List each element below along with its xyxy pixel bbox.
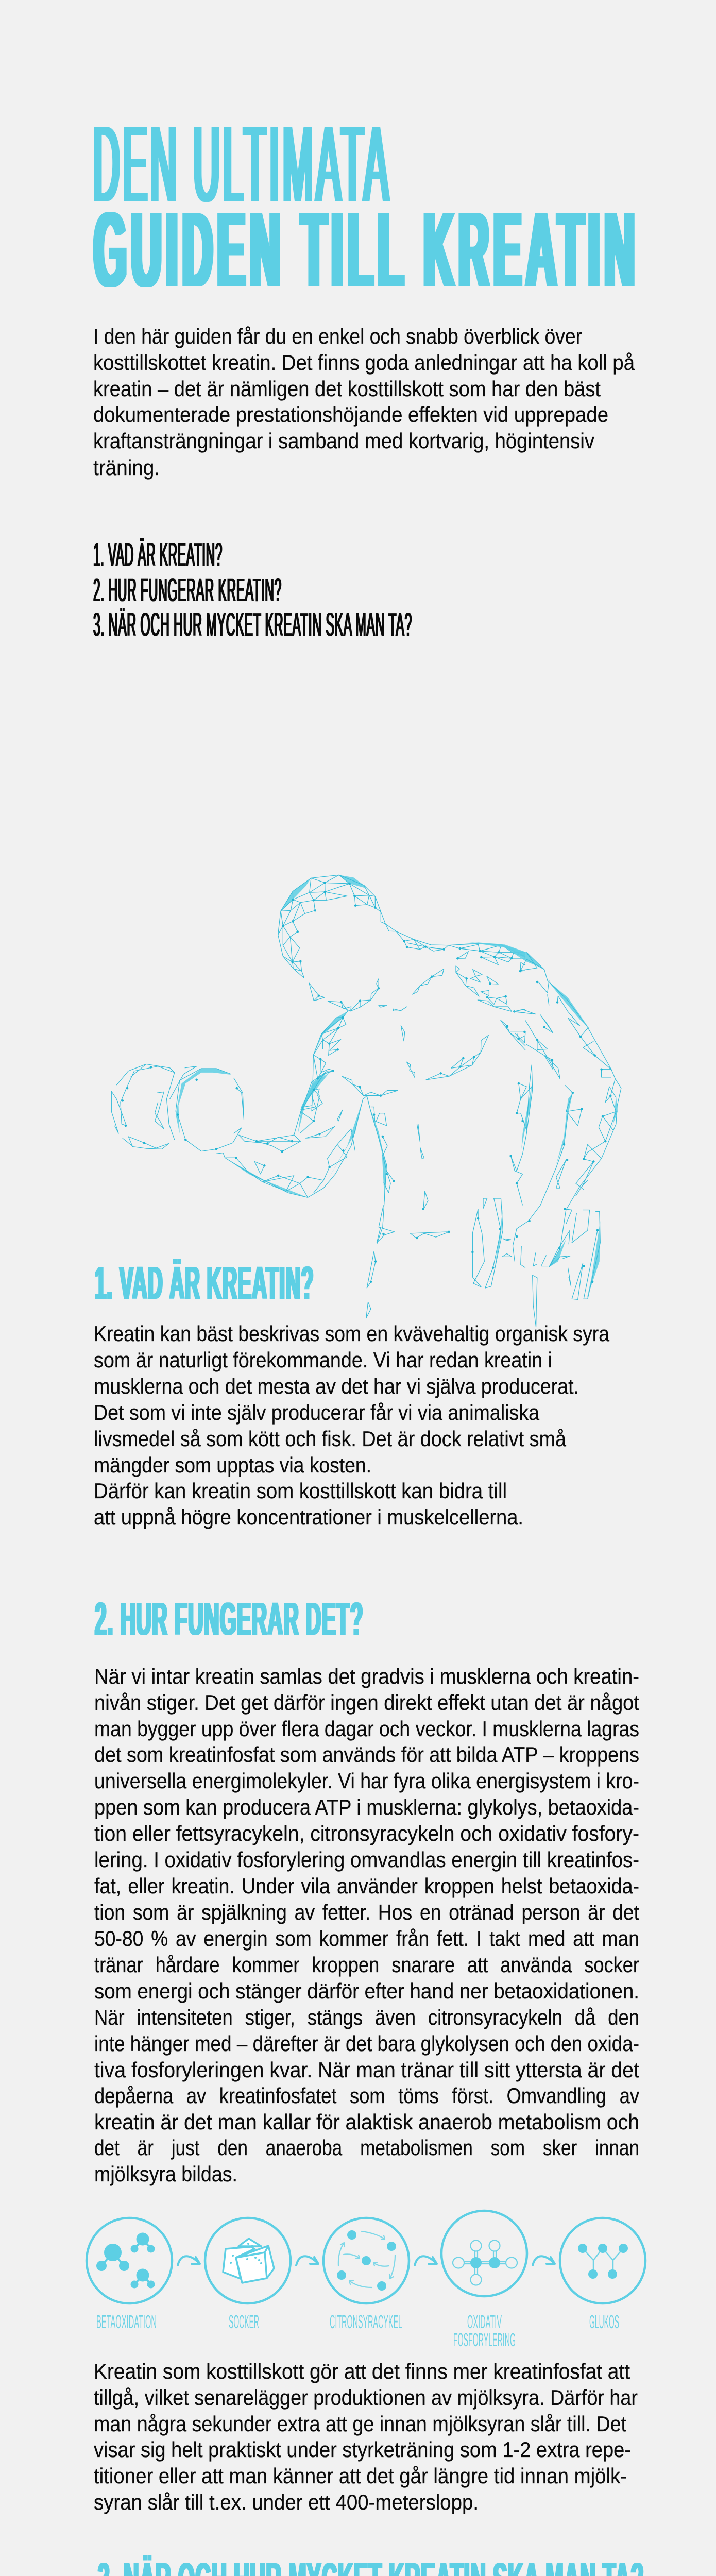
text: section 2: mjölksyra bildas. (94, 2162, 237, 2186)
text: section 1: Det som vi inte själv producerar får vi via animaliska (94, 1400, 540, 1425)
text: section 1: Kreatin kan bäst beskrivas som en kvävehaltig organisk syra (94, 1321, 610, 1346)
icon labels: SOCKER (229, 2311, 259, 2332)
icon labels: CITRONSYRACYKEL (330, 2311, 402, 2332)
text: section 2: det som kreatinfosfat som används för att bilda ATP – kroppens (94, 1742, 639, 1767)
arrow 1 (178, 2256, 200, 2265)
illustration: low-poly bodybuilder with dumbbells (111, 875, 621, 1327)
icon: betaoxidation (87, 2218, 172, 2303)
text: section 2: kreatin är det man kallar för alaktisk anaerob metabolism och (94, 2110, 639, 2134)
text: section 2: När vi intar kreatin samlas det gradvis i musklerna och kreatin- (94, 1664, 639, 1688)
text: section 2: fat, eller kreatin. Under vila använder kroppen helst betaoxida- (94, 1874, 639, 1898)
intro text: kreatin – det är nämligen det kosttillskott som har den bäst (93, 377, 601, 401)
icon labels: FOSFORYLERING (453, 2329, 516, 2350)
text: section 2: lering. I oxidativ fosforylering omvandlas energin till kreatinfos- (94, 1848, 639, 1872)
flow diagram: energy systems (87, 2211, 645, 2350)
icon: citronsyracykel (323, 2218, 409, 2303)
text: 1. VAD ÄR KREATIN? (95, 1258, 314, 1309)
text: section 2: tion eller fettsyracykeln, citronsyracykeln och oxidativ fosfory- (94, 1821, 639, 1845)
text: creatine as supplement: tillgå, vilket senarelägger produktionen av mjölksyra. Därför har (94, 2385, 638, 2410)
icon: oxidativ fosforylering (441, 2211, 527, 2296)
intro text: I den här guiden får du en enkel och snabb överblick över (93, 324, 582, 348)
text: section 2: man bygger upp över flera dagar och veckor. I musklerna lagras (94, 1717, 639, 1741)
intro text: kraftansträngningar i samband med kortvarig, högintensiv (93, 429, 594, 453)
text: section 2: När intensiteten stiger, stängs även citronsyracykeln då den (94, 2005, 639, 2029)
icon labels (96, 2311, 619, 2350)
text: creatine as supplement: Kreatin som kosttillskott gör att det finns mer kreatinfosfat att (94, 2359, 630, 2383)
intro text: kosttillskottet kreatin. Det finns goda anledningar att ha koll på (93, 350, 635, 375)
text: section 2 (94, 1664, 639, 2186)
intro text: dokumenterade prestationshöjande effekten vid upprepade (93, 402, 608, 427)
icon labels: OXIDATIV (467, 2311, 502, 2332)
text: creatine as supplement: syran slår till t.ex. under ett 400-meterslopp. (94, 2490, 479, 2514)
text: section 2: som energi och stänger därför efter hand ner betaoxidationen. (94, 1979, 639, 2003)
flow diagram: energy systems: GLUKOS (589, 2311, 619, 2332)
table of contents: 1. VAD ÄR KREATIN? (93, 536, 223, 573)
icon labels: BETAOXIDATION (96, 2311, 157, 2332)
text: section 2: depåerna av kreatinfosfatet som töms först. Omvandling av (94, 2083, 639, 2108)
text: section 1: musklerna och det mesta av det har vi själva producerat. (94, 1374, 579, 1398)
text: section 2: nivån stiger. Det get därför ingen direkt effekt utan det är något (94, 1690, 639, 1715)
text: section 2: universella energimolekyler. Vi har fyra olika energisystem i kro- (94, 1769, 639, 1793)
table of contents (93, 536, 412, 643)
text: section 2: tion som är spjälkning av fetter. Hos en otränad person är det (94, 1900, 639, 1924)
text: section 2: tränar hårdare kommer kroppen snarare att använda socker (94, 1953, 639, 1977)
text: section 2: tiva fosforyleringen kvar. När man tränar till sitt yttersta är det (94, 2058, 639, 2082)
text: 2. HUR FUNGERAR DET? (95, 1594, 364, 1645)
table of contents: 2. HUR FUNGERAR KREATIN? (93, 571, 282, 608)
text: section 1: Därför kan kreatin som kosttillskott kan bidra till (94, 1479, 507, 1503)
text: section 1 (94, 1321, 610, 1529)
arrow 3 (415, 2256, 437, 2265)
text: section 1: livsmedel så som kött och fisk. Det är dock relativt små (94, 1427, 567, 1451)
text: creatine as supplement: titioner eller att man känner att det går längre tid innan mjölk- (94, 2464, 627, 2488)
arrow 4 (533, 2256, 555, 2265)
text: section 1: som är naturligt förekommande. Vi har redan kreatin i (94, 1348, 552, 1372)
text: section 1: att uppnå högre koncentrationer i muskelcellerna. (94, 1505, 523, 1529)
text: creatine as supplement: visar sig helt praktiskt under styrketräning som 1-2 extra repe- (94, 2437, 631, 2462)
text: creatine as supplement: man några sekunder extra att ge innan mjölksyran slår till. Det (94, 2412, 626, 2436)
arrow 2 (296, 2256, 318, 2265)
text: section 2: ppen som kan producera ATP i musklerna: glykolys, betaoxida- (94, 1795, 639, 1819)
intro text (93, 324, 635, 480)
text: section 1: mängder som upptas via kosten. (94, 1453, 371, 1477)
title (93, 104, 639, 309)
intro text: träning. (93, 455, 160, 480)
text: section 2: 50-80 % av energin som kommer från fett. I takt med att man (94, 1926, 639, 1951)
icon: glukos (560, 2218, 645, 2303)
icon: socker (205, 2218, 291, 2303)
text: section 2: inte hänger med – därefter är det bara glykolysen och den oxida- (94, 2031, 639, 2056)
text: creatine as supplement (94, 2359, 638, 2514)
